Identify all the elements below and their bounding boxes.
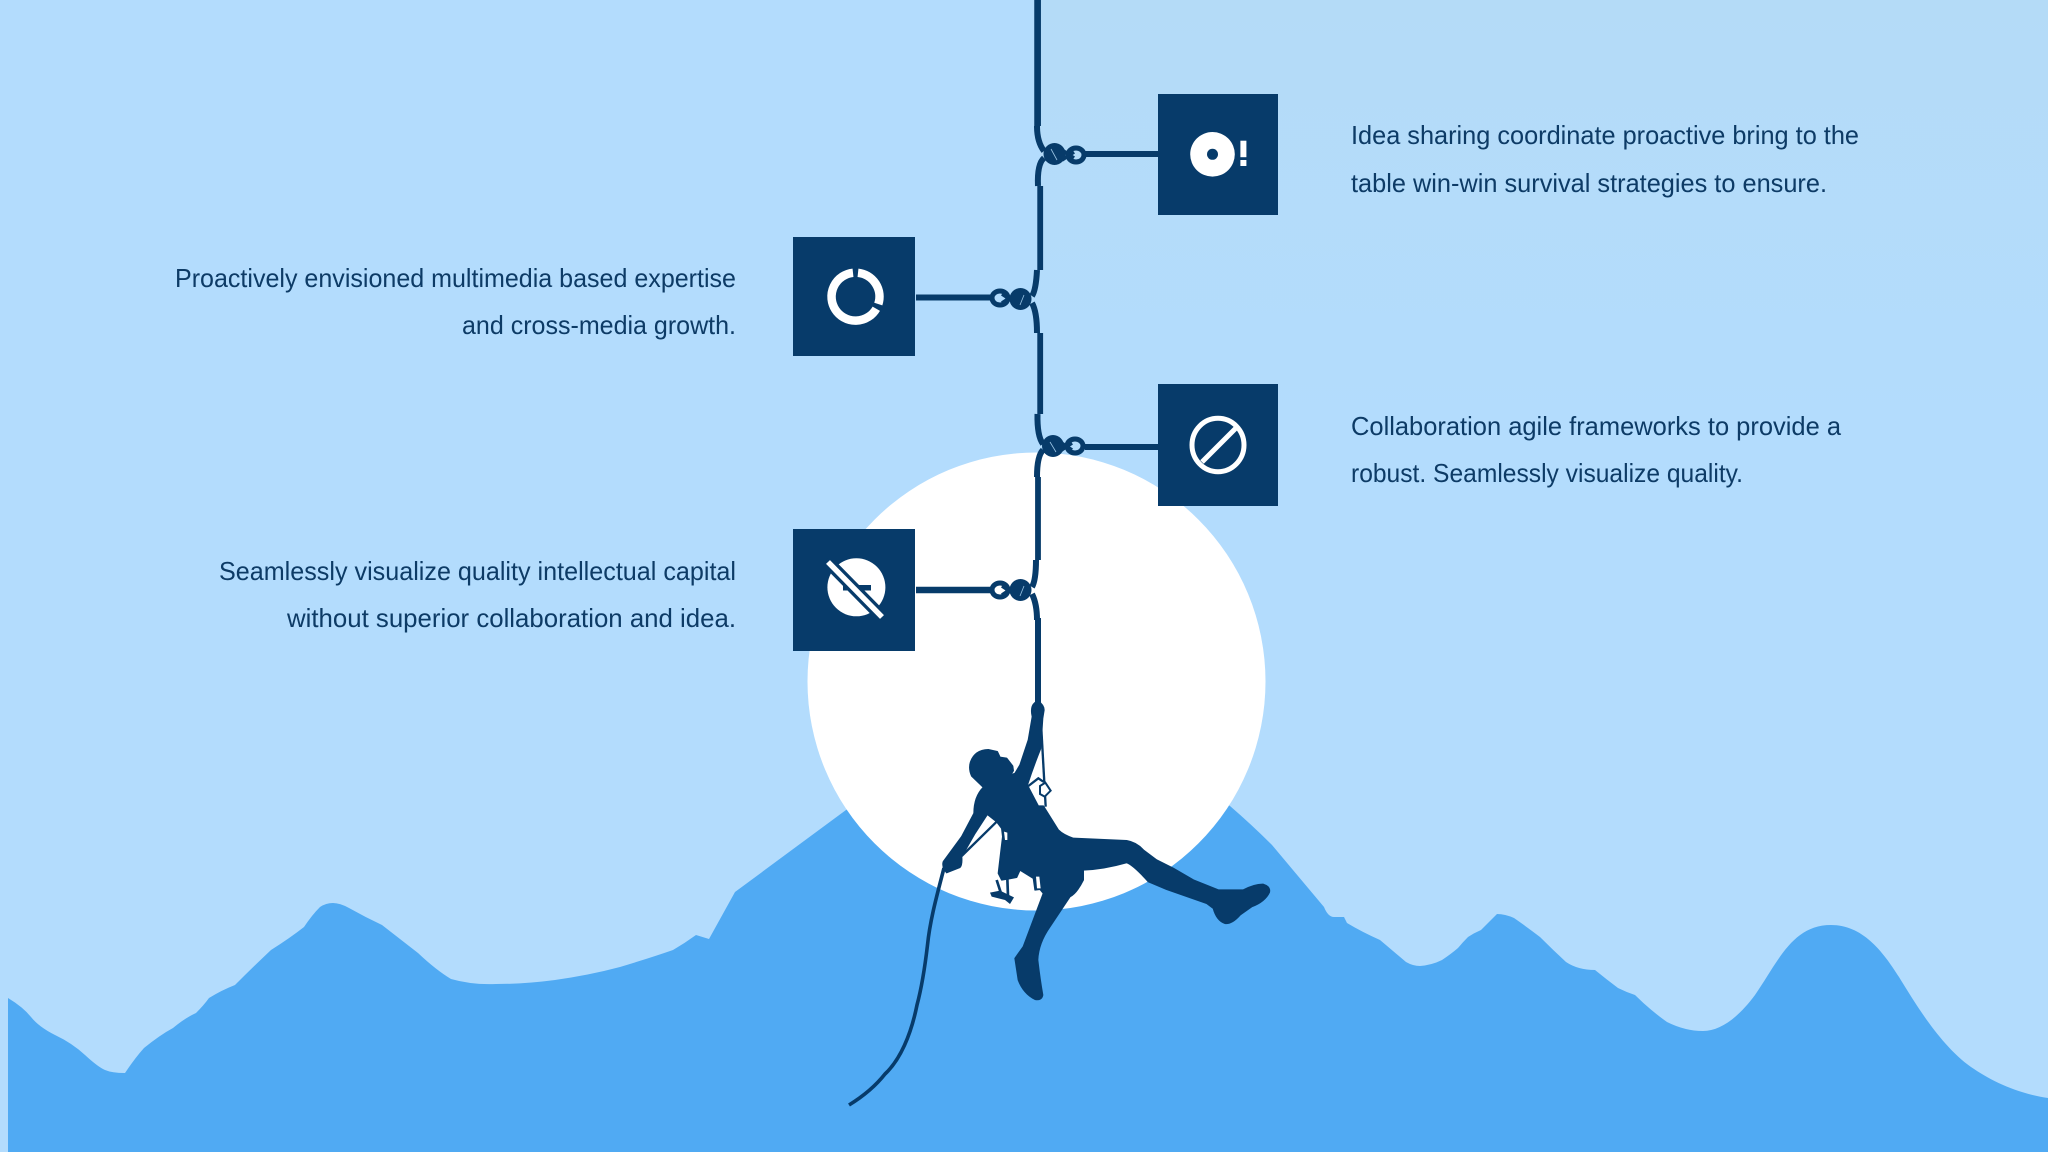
text block: proactively envisioned: and cross-media growth. bbox=[462, 310, 736, 340]
mountain range bbox=[8, 690, 2048, 1152]
knot and branch: second left bbox=[916, 288, 1032, 310]
white sun circle bbox=[808, 452, 1266, 910]
trailing rope bbox=[849, 868, 944, 1105]
icon box: alert disc bbox=[1158, 94, 1278, 215]
knot and branch: fourth left bbox=[916, 579, 1032, 601]
text block: collaboration agile: Collaboration agile frameworks to provide a bbox=[1351, 411, 1842, 441]
text block: seamlessly visualize: Seamlessly visualize quality intellectual capital bbox=[219, 556, 736, 586]
climber silhouette bbox=[943, 701, 1270, 1000]
text block: idea sharing: Idea sharing coordinate proactive bring to the bbox=[1351, 120, 1859, 150]
text block: proactively envisioned bbox=[175, 263, 736, 340]
climbing strap bbox=[962, 822, 997, 856]
rope with knots bbox=[916, 0, 1158, 710]
text block: seamlessly visualize bbox=[219, 556, 736, 633]
text block: collaboration agile bbox=[1351, 411, 1842, 488]
text block: seamlessly visualize: without superior collaboration and idea. bbox=[286, 603, 736, 633]
icon box: segmented ring bbox=[793, 237, 915, 356]
text block: proactively envisioned: Proactively envisioned multimedia based expertise bbox=[175, 263, 736, 293]
harness gear bbox=[990, 832, 1041, 904]
text block: collaboration agile: robust. Seamlessly visualize quality. bbox=[1351, 458, 1743, 488]
icon box: prohibited sign bbox=[1158, 384, 1278, 506]
belay rope and carabiner bbox=[1028, 717, 1051, 807]
icon box: crossed-out disc bbox=[793, 529, 915, 651]
text block: idea sharing: table win-win survival strategies to ensure. bbox=[1351, 168, 1827, 198]
knot and branch: third right bbox=[1042, 435, 1158, 457]
text block: idea sharing bbox=[1351, 120, 1859, 198]
knot and branch: top right bbox=[1044, 143, 1158, 165]
